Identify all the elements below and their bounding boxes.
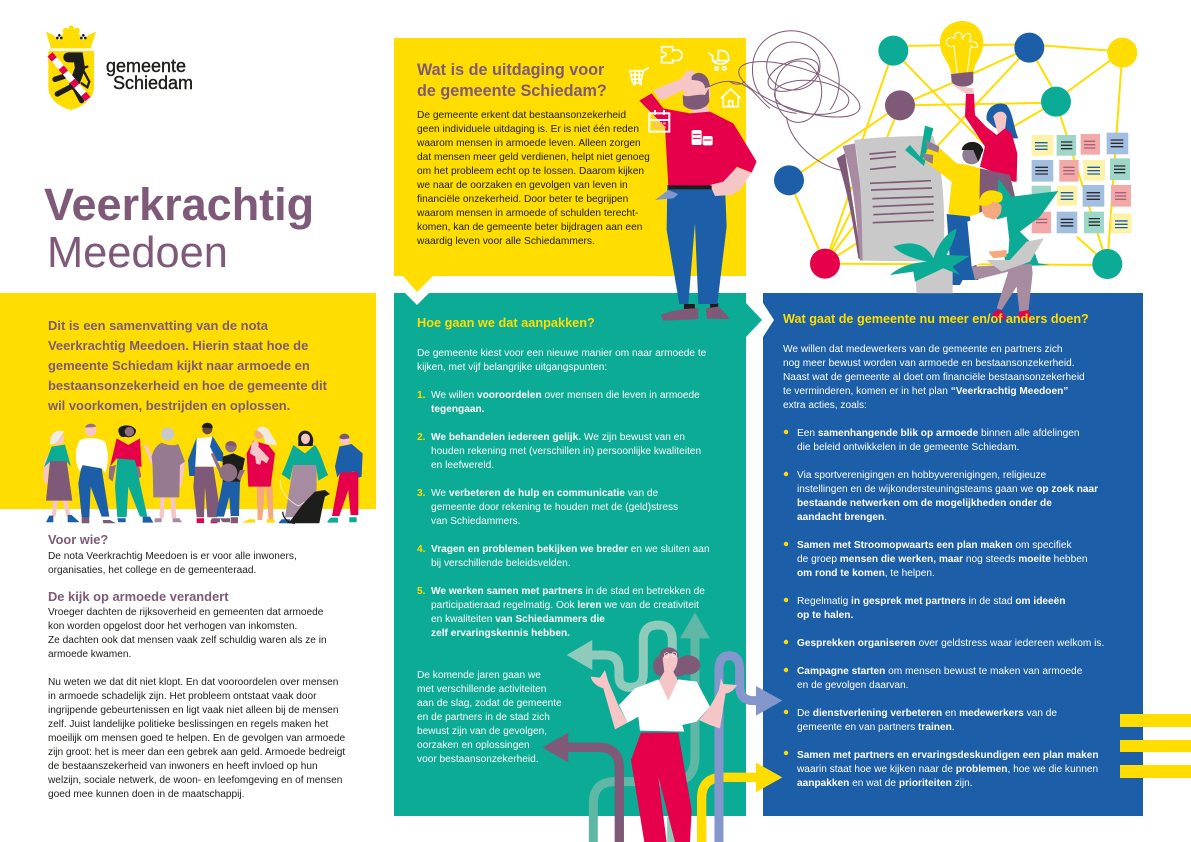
bulleted list: actions: Campagne starten om mensen bewust te maken van armoede bbox=[797, 666, 1083, 677]
numbered list: principles: 2. bbox=[417, 432, 426, 443]
numbered list: principles: Vragen en problemen bekijken we breder en we sluiten aan bbox=[431, 544, 710, 555]
figure: woman bbox=[591, 647, 737, 842]
body: challenge: De gemeente erkent dat bestaansonzekerheid bbox=[417, 110, 626, 121]
body: coming years: voor bestaansonzekerheid. bbox=[417, 754, 539, 765]
text block: summary intro bbox=[47, 318, 328, 413]
figure 1 bbox=[43, 431, 79, 522]
plant behind bbox=[997, 178, 1058, 267]
body: actions intro: te verminderen, komen er in het plan “Veerkrachtig Meedoen” bbox=[783, 386, 1068, 397]
bulleted list: actions: Samen met partners en ervaringsdeskundigen een plan maken bbox=[797, 750, 1099, 761]
body: coming years: De komende jaren gaan we bbox=[417, 670, 541, 681]
body: de kijk: Ze dachten ook dat mensen vaak zelf schuldig waren als ze in bbox=[48, 635, 327, 646]
figure: woman raising bulb bbox=[952, 84, 1018, 213]
figure 7 bbox=[242, 427, 277, 523]
numbered list: principles: tegengaan. bbox=[431, 404, 485, 415]
numbered list: principles: We verbeteren de hulp en communicatie van de bbox=[431, 488, 659, 499]
body: challenge: waarom mensen in armoede of schulden terecht- bbox=[416, 208, 638, 219]
body: voor wie: organisaties, het college en de gemeenteraad. bbox=[48, 565, 256, 576]
bulleted list: actions: Gesprekken organiseren over geldstress waar iedereen welkom is. bbox=[797, 638, 1104, 649]
body: challenge bbox=[416, 110, 650, 247]
text block: summary intro: bestaansonzekerheid en hoe de gemeente dit bbox=[48, 378, 328, 393]
heading: challenge: Wat is de uitdaging voor bbox=[417, 61, 605, 79]
numbered list: principles: participatieraad regelmatig. Ook leren we van de creativiteit bbox=[431, 600, 699, 611]
panel: challenge yellow bbox=[394, 38, 746, 292]
body: challenge: dat mensen meer geld verdienen, helpt niet genoeg bbox=[417, 152, 650, 163]
illustration: group of residents bbox=[43, 423, 363, 523]
body: de kijk: Nu weten we dat dit niet klopt. En dat vooroordelen over mensen bbox=[48, 677, 338, 688]
heading: voor wie: Voor wie? bbox=[48, 532, 108, 547]
body: coming years: aan de slag, zodat de gemeente bbox=[417, 698, 562, 709]
numbered list: principles: bij verschillende beleidsvelden. bbox=[431, 558, 571, 569]
body: de kijk: zijn groot: het is meer dan een gebrek aan geld. Armoede bedreigt bbox=[48, 747, 345, 758]
body: actions intro: extra acties, zoals: bbox=[783, 400, 867, 411]
body: coming years: bewust zijn van de gevolgen, bbox=[417, 726, 547, 737]
numbered list: principles: 4. bbox=[417, 544, 426, 555]
arrow: green up bbox=[593, 613, 710, 842]
arrow: periwinkle right bbox=[719, 656, 782, 842]
bulleted list: actions: aandacht brengen. bbox=[797, 512, 887, 523]
numbered list: principles bbox=[417, 390, 710, 639]
body: de kijk: ingrijpende gebeurtenissen en ligt vaak niet alleen bij de mensen bbox=[48, 705, 338, 716]
bulleted list: actions: Regelmatig in gesprek met partners in de stad om ideeën bbox=[797, 596, 1065, 607]
connector from head to scribble bbox=[709, 81, 770, 108]
bulleted list: actions bbox=[784, 428, 1104, 789]
body: approach intro: kijken, met vijf belangrijke uitgangspunten: bbox=[417, 362, 607, 373]
text block: summary intro: gemeente Schiedam kijkt naar armoede en bbox=[48, 358, 310, 373]
illustration: man scratching head bbox=[629, 47, 770, 321]
figure 4 bbox=[143, 427, 185, 522]
body: challenge: waarom mensen in armoede leven. Alleen zorgen bbox=[416, 138, 641, 149]
numbered list: principles: van Schiedammers. bbox=[431, 516, 520, 527]
text block: summary intro: Veerkrachtig Meedoen. Hierin staat hoe de bbox=[48, 338, 308, 353]
body: de kijk: in armoede schadelijk zijn. Het probleem ontstaat vaak door bbox=[48, 691, 317, 702]
body: challenge: we naar de oorzaken en gevolgen van leven in bbox=[416, 180, 628, 191]
heading: actions: Wat gaat de gemeente nu meer en/of anders doen? bbox=[783, 312, 1089, 326]
figure: man with yellow shirt bbox=[922, 140, 983, 285]
body: de kijk: de bestaanszekerheid van inwoners en heeft invloed op hun bbox=[48, 761, 318, 772]
bulleted list: actions: waarin staat hoe we kijken naar de problemen, hoe we die kunnen bbox=[796, 764, 1098, 775]
text block: summary intro: wil voorkomen, bestrijden en oplossen. bbox=[47, 398, 290, 413]
title bbox=[44, 179, 314, 277]
illustration: woman with arrows bbox=[542, 613, 782, 842]
body: actions intro bbox=[783, 344, 1085, 411]
heading: de kijk: De kijk op armoede verandert bbox=[48, 589, 229, 604]
body: de kijk: zelf. Juist landelijke politieke beslissingen en regels maken het bbox=[48, 719, 328, 730]
icon: pram bbox=[708, 50, 729, 70]
icon: house bbox=[721, 89, 741, 107]
title: Veerkrachtig bbox=[44, 179, 314, 230]
decorative yellow bars bbox=[1120, 714, 1191, 778]
network nodes bbox=[774, 33, 1137, 279]
bulleted list: actions: instellingen en de wijkondersteuningsteams gaan we op zoek naar bbox=[797, 484, 1098, 495]
bulleted list: actions: bestaande netwerken om de mogelijkheden onder de bbox=[797, 498, 1052, 509]
body: actions intro: nog meer bewust worden van armoede en bestaansonzekerheid. bbox=[783, 358, 1075, 369]
icon: puzzle bbox=[662, 47, 682, 63]
figure 6 bbox=[211, 441, 245, 523]
bulleted list: actions: gemeente en van partners trainen. bbox=[797, 722, 955, 733]
numbered list: principles: 5. bbox=[417, 586, 426, 597]
body: de kijk: goed mee kunnen doen in de maatschappij. bbox=[48, 789, 244, 800]
arrow: mint winding bbox=[567, 625, 672, 690]
bulleted list: actions: de groep mensen die werken, maar nog steeds moeite hebben bbox=[797, 554, 1087, 565]
bulleted list: actions: Samen met Stroomopwaarts een plan maken om specifiek bbox=[797, 540, 1073, 551]
panel: left yellow background bbox=[0, 293, 376, 509]
body: approach intro bbox=[417, 348, 707, 373]
body: challenge: waardig leven voor alle Schiedammers. bbox=[416, 236, 595, 247]
body: de kijk: welzijn, sociale netwerk, de woon- en leefomgeving en of mensen bbox=[47, 775, 342, 786]
icon: calendar bbox=[649, 110, 669, 132]
text block: voor wie bbox=[48, 532, 297, 576]
text: municipality name bbox=[106, 56, 193, 93]
figure 3 bbox=[109, 425, 153, 523]
bulleted list: actions: De dienstverlening verbeteren en medewerkers van de bbox=[797, 708, 1057, 719]
figure 2 bbox=[76, 424, 116, 523]
numbered list: principles: We werken samen met partners in de stad en betrekken de bbox=[431, 586, 705, 597]
numbered list: principles: houden rekening met (verschillen in) persoonlijke kwaliteiten bbox=[431, 446, 701, 457]
body: coming years bbox=[417, 670, 562, 765]
arrow: purple left bbox=[542, 733, 619, 842]
figure: person with laptop bbox=[967, 190, 1044, 319]
body: de kijk: kon worden opgelost door het verhogen van inkomsten. bbox=[48, 621, 297, 632]
numbered list: principles: We willen vooroordelen over mensen die leven in armoede bbox=[431, 390, 700, 401]
bulleted list: actions: op te halen. bbox=[797, 610, 853, 621]
body: approach intro: De gemeente kiest voor een nieuwe manier om naar armoede te bbox=[417, 348, 707, 359]
panel: approach teal bbox=[394, 293, 762, 816]
icon: coins bbox=[692, 130, 713, 145]
numbered list: principles: 1. bbox=[417, 390, 426, 401]
numbered list: principles: We behandelen iedereen gelijk. We zijn bewust van en bbox=[431, 432, 685, 443]
icon: shopping cart bbox=[629, 68, 649, 85]
sticky notes bbox=[1032, 133, 1132, 233]
figure 9 bbox=[327, 434, 363, 523]
document with checkmark bbox=[837, 126, 944, 262]
arrow: yellow right bbox=[702, 763, 782, 842]
text block: de kijk op armoede verandert bbox=[47, 589, 346, 800]
body: actions intro: Naast wat de gemeente al doet om financiële bestaansonzekerheid bbox=[783, 372, 1085, 383]
heading: challenge: de gemeente Schiedam? bbox=[417, 82, 607, 100]
body: de kijk bbox=[47, 607, 346, 800]
body: coming years: oorzaken en oplossingen bbox=[417, 740, 530, 751]
numbered list: principles: en kwaliteiten van Schiedammers die bbox=[431, 614, 605, 625]
body: challenge: komen, kan de gemeente beter bijdragen aan een bbox=[417, 222, 642, 233]
bulleted list: actions: en de gevolgen daarvan. bbox=[797, 680, 908, 691]
icon: light bulb bbox=[940, 21, 983, 87]
body: de kijk: moeilijk om mensen goed te helpen. En de gevolgen van armoede bbox=[48, 733, 346, 744]
text: municipality name: gemeente bbox=[106, 56, 186, 76]
heading: challenge bbox=[417, 61, 607, 100]
icon: crown and coat of arms bbox=[46, 25, 96, 110]
body: challenge: geen individuele uitdaging is. Er is niet één reden bbox=[417, 124, 639, 135]
figure 8 bbox=[278, 431, 330, 523]
body: de kijk: armoede kwamen. bbox=[48, 649, 131, 660]
numbered list: principles: 3. bbox=[417, 488, 426, 499]
text: municipality name: Schiedam bbox=[113, 73, 193, 93]
body: actions intro: We willen dat medewerkers van de gemeente en partners zich bbox=[783, 344, 1063, 355]
logo: gemeente Schiedam bbox=[46, 25, 193, 110]
illustration: network with teamwork bbox=[730, 21, 1137, 319]
body: voor wie: De nota Veerkrachtig Meedoen is er voor alle inwoners, bbox=[48, 551, 297, 562]
numbered list: principles: zelf ervaringskennis hebben. bbox=[431, 628, 570, 639]
bulleted list: actions: om rond te komen, te helpen. bbox=[797, 568, 935, 579]
bulleted list: actions: die beleid ontwikkelen in de gemeente Schiedam. bbox=[797, 442, 1019, 453]
scribble bbox=[730, 31, 866, 171]
numbered list: principles: en leefwereld. bbox=[431, 460, 494, 471]
heading: approach: Hoe gaan we dat aanpakken? bbox=[417, 315, 595, 330]
body: challenge: om het probleem echt op te lossen. Daarom kijken bbox=[417, 166, 644, 177]
network lines bbox=[789, 44, 1122, 265]
figure 5 bbox=[188, 423, 223, 523]
figure: man bbox=[639, 71, 757, 321]
panel: actions blue bbox=[763, 293, 1143, 816]
body: voor wie bbox=[48, 551, 297, 576]
body: de kijk: Vroeger dachten de rijksoverheid en gemeenten dat armoede bbox=[48, 607, 324, 618]
body: coming years: met verschillende activiteiten bbox=[417, 684, 546, 695]
bulleted list: actions: Via sportverenigingen en hobbyverenigingen, religieuze bbox=[797, 470, 1047, 481]
plant in pot bbox=[890, 228, 969, 293]
title: Meedoen bbox=[47, 229, 228, 277]
text block: summary intro: Dit is een samenvatting van de nota bbox=[48, 318, 269, 333]
body: coming years: en de partners in de stad zich bbox=[417, 712, 550, 723]
numbered list: principles: gemeente door rekening te houden met de (geld)stress bbox=[431, 502, 678, 513]
bulleted list: actions: Een samenhangende blik op armoede binnen alle afdelingen bbox=[797, 428, 1080, 439]
body: challenge: financiële onzekerheid. Door beter te begrijpen bbox=[417, 194, 628, 205]
bulleted list: actions: aanpakken en wat de prioriteiten zijn. bbox=[797, 778, 973, 789]
